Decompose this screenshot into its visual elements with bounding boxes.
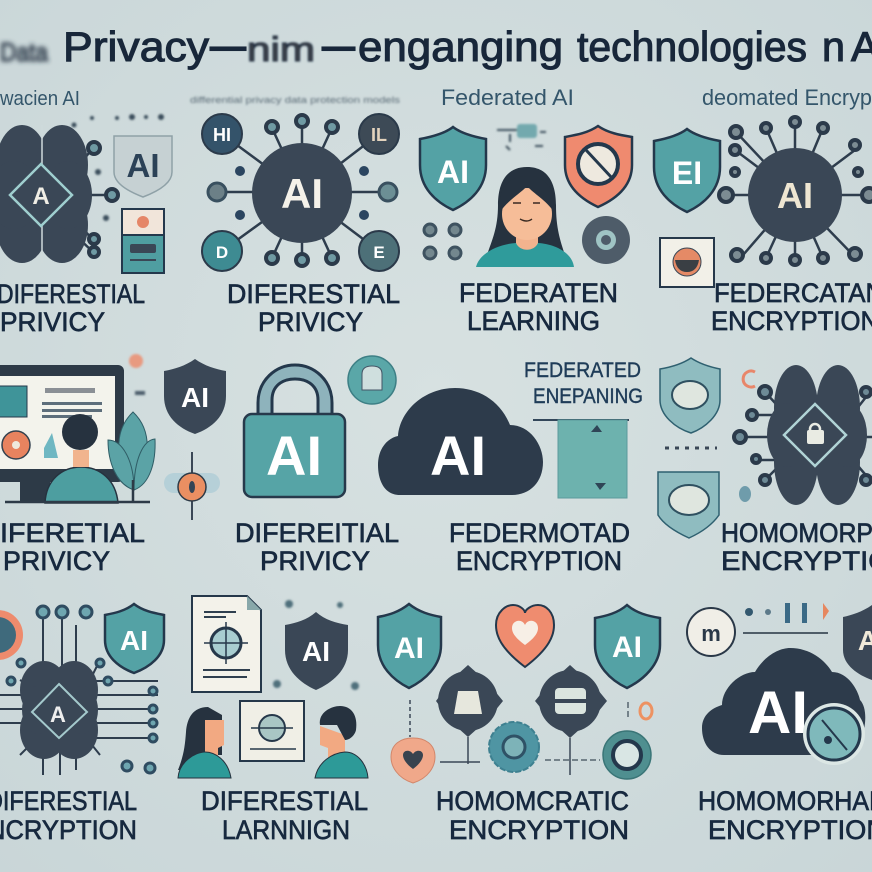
text: FEDERATED ENEPANING [524,359,643,408]
label: row 3: ENCRYPTION [449,815,629,845]
icon: hub: AI [777,175,813,216]
label: row 2: ENCRYPTION [456,546,622,576]
icon: bottom light shield [658,472,719,538]
icon: grey AI shield [114,136,172,197]
icon: coral ring [0,610,23,660]
panel: heart and pins [436,605,660,779]
icon: brain [20,661,98,759]
icon: grey AI shield: AI [126,147,160,184]
icon: grey spiral badge [582,216,630,264]
icon: teal panel [533,420,629,498]
icon: teal gear [489,722,539,772]
icon: top-right node: IL [371,125,387,145]
icon: picture card [240,701,304,761]
icon: bottom-right node: E [373,243,385,262]
icon: monitor [0,365,124,503]
icon: teal AI shield [595,605,660,688]
icon: dark AI shield edge [843,605,872,680]
label: row 1: PRIVICY [258,307,363,337]
subheading: Federated AI: Federated AI [441,85,574,110]
icon: hub: AI [281,170,323,217]
icon: dark pin right [535,665,607,775]
label: row 2: PRIVICY [3,546,110,576]
icon: AI cloud: AI [748,679,808,746]
icon: brain with lock [734,365,872,505]
label: row 1 [0,278,872,337]
icon: teal AI shield: AI [394,632,424,665]
icon: coral arc [743,371,755,387]
icon: magnifier [803,703,865,765]
icon: bottom-right node [359,231,399,271]
icon: plant [5,412,155,502]
subheading: deomated Encryp: deomated Encryp [702,85,872,110]
label: row 1: DIFERESTIAL [227,279,400,309]
title: enganging [358,23,563,70]
icon: dark AI shield [164,359,226,434]
icon: hub [748,148,842,242]
icon: teal shield [420,127,486,210]
icon: white circle: m [701,621,721,646]
label: row 3: HOMOMCRATIC [436,786,629,816]
panel: encryption hub [654,117,872,287]
icon: picture card [660,238,714,287]
icon: diamond A: A [50,702,66,727]
icon: padlock: AI [266,424,322,487]
icon: top-left node [202,114,242,154]
icon: dashes [545,702,628,760]
icon: AI cloud [702,648,865,755]
title: nim [247,31,315,69]
icon: teal blob and specks [497,124,546,150]
label: row 2: PRIVICY [260,546,370,576]
label: row 3 [0,786,872,845]
title: n [822,23,845,70]
icon: coral ring [640,703,652,719]
icon: dark AI shield: AI [302,636,330,667]
panel: AI cloud with magnifier [687,603,872,765]
icon: connector line and glyphs [743,603,829,633]
label: row 3: LARNNIGN [222,815,350,845]
icon: card [122,209,164,273]
icon: teal AI shield: AI [612,631,642,664]
icon: diamond A [32,684,87,738]
icon: document [192,596,261,692]
panel: brain and card [0,114,172,273]
icon: teal badge [603,731,651,779]
panel: federated woman [420,124,632,267]
icon: man profile [315,706,368,778]
icon: brain AI: A [32,183,50,210]
label: row 2: DIFEREITIAL [235,518,399,548]
label: row 2: IFERETIAL [0,518,145,548]
icon: heart [496,605,554,667]
icon: top-right node [359,114,399,154]
icon: teal AI shield [378,604,441,688]
icon: EI shield: EI [672,155,702,191]
icon: node dots [424,224,461,259]
label: row 1: DIFERESTIAL [0,279,145,309]
icon: bottom-left node: D [216,243,228,262]
icon: white circle [687,608,735,656]
panel: AI hub [202,114,399,271]
title: technologies [577,23,807,70]
icon: teal drop [739,486,751,502]
icon: dark AI shield [285,612,348,690]
icon: specks around shield [273,600,359,690]
subheading: blurred caption: differential privacy data protection models [190,95,401,105]
icon: person [45,414,118,503]
subheading: wacien AI: wacien AI [0,88,80,110]
label: row 3: DIFERESTIAL [201,786,368,816]
icon: EI shield [654,129,720,212]
icon: bottom-left node [202,231,242,271]
icon: woman [476,167,574,267]
icon: coral blob [129,354,145,395]
icon: coral pin heart [391,700,435,783]
label: row 1: PRIVICY [0,307,105,337]
label: row 1: LEARNING [467,306,600,336]
icon: coral target [164,452,220,520]
icon: padlock [244,365,345,497]
label: row 2 [0,518,872,576]
icon: dark pin left [436,665,503,764]
icon: top light shield [660,358,720,433]
icon: teal badge [348,356,396,404]
icon: top-left node: HI [213,125,231,145]
text: FEDERATED ENEPANING: ENEPANING [533,385,643,408]
icon: teal AI shield: AI [120,625,148,656]
icon: AI cloud [378,388,543,495]
title: Data [0,37,48,67]
icon: teal AI shield [105,604,164,673]
icon: brain AI [0,125,118,263]
panel: brain with lines [0,606,158,775]
icon: dark AI shield: AI [181,382,209,413]
icon: dotted connector [665,446,717,450]
title [0,23,872,70]
icon: AI cloud: AI [430,424,486,487]
icon: small specks [72,114,164,221]
icon: teal shield: AI [437,154,469,190]
text: FEDERATED ENEPANING: FEDERATED [524,359,641,382]
label: row 1: FEDERATEN [459,278,618,308]
icon: hub [252,143,352,243]
title: Privacy [63,23,209,70]
icon: woman profile [178,707,231,778]
icon: coral shield [565,126,632,207]
panel: person at monitor [0,365,155,503]
label: row 2: FEDERMOTAD [449,518,630,548]
